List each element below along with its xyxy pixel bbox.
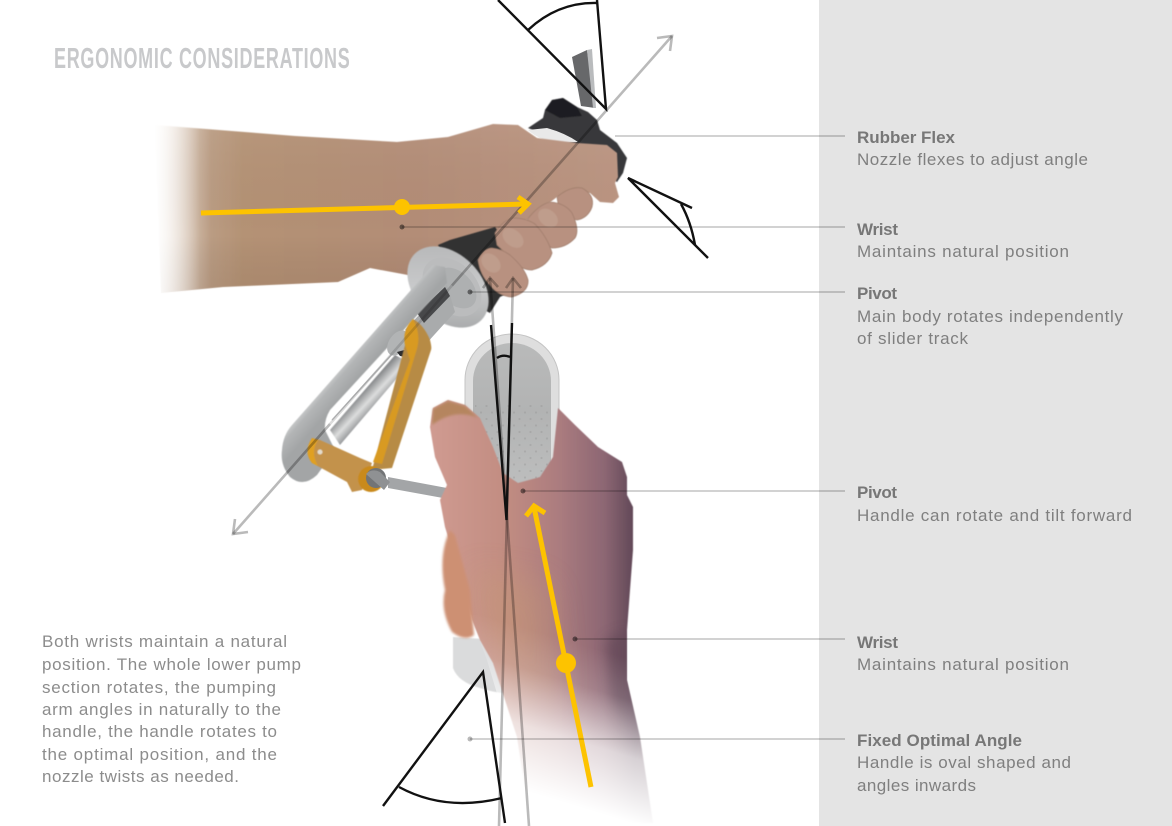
gold link	[308, 438, 384, 492]
nozzle tip	[572, 49, 596, 108]
label: handle pivot	[520, 483, 1132, 525]
label: upper wrist: Wrist	[857, 220, 898, 239]
label: fixed optimal angle: Handle is oval shaped and	[857, 753, 1071, 772]
text block: description: arm angles in naturally to the	[42, 700, 281, 719]
angle: handle tilt	[491, 323, 512, 520]
illustration: fingers of upper hand	[478, 188, 593, 297]
label: lower wrist	[572, 633, 1069, 674]
white collar	[528, 128, 578, 143]
thin rod in slot	[332, 353, 393, 420]
black handle grip	[438, 227, 520, 313]
title: ERGONOMIC CONSIDERATIONS	[54, 43, 350, 75]
text block: description: Both wrists maintain a natural	[42, 632, 287, 651]
angle: nozzle	[498, 0, 606, 109]
label: lower wrist: Maintains natural position	[857, 655, 1069, 674]
label: lower wrist: Wrist	[857, 633, 898, 652]
text block: description: the optimal position, and the	[42, 745, 277, 764]
yellow arrow: lower forearm axis	[526, 506, 591, 787]
fade to white	[470, 615, 660, 826]
clevis	[366, 468, 390, 490]
text block: description	[42, 632, 301, 786]
capsule inner	[473, 343, 551, 490]
pin	[388, 477, 447, 498]
label: pump pivot: of slider track	[857, 329, 968, 348]
grey axis arrow through pump	[233, 36, 672, 534]
warm tint on lower forearm	[470, 570, 560, 700]
label: fixed optimal angle: angles inwards	[857, 776, 976, 795]
silver frame	[282, 265, 447, 482]
label: fixed optimal angle	[468, 731, 1071, 795]
yellow arrow: upper forearm axis	[201, 197, 528, 215]
illustration: pump body and pumping arm	[282, 230, 505, 498]
label: fixed optimal angle: Fixed Optimal Angle	[857, 731, 1022, 750]
text block: description: section rotates, the pumping	[42, 678, 276, 697]
gold pumping arm	[372, 319, 431, 470]
text block: description: position. The whole lower pump	[42, 655, 301, 674]
hidden cylinder behind gold arm	[383, 326, 413, 360]
label: pump pivot	[468, 284, 1124, 348]
illustration: handle capsule	[453, 334, 559, 693]
illustration: upper forearm gripping the pump nozzle	[140, 49, 627, 313]
thumb tip	[432, 401, 478, 425]
label: rubber flex: Nozzle flexes to adjust angle	[857, 150, 1088, 169]
label: rubber flex: Rubber Flex	[857, 128, 956, 147]
angle: fist	[628, 178, 708, 258]
label: upper wrist	[400, 220, 1069, 261]
pivot disc	[391, 230, 505, 344]
wrist shadow	[604, 631, 632, 704]
lower tube	[330, 355, 410, 445]
text block: description: handle, the handle rotates to	[42, 722, 277, 741]
forearm	[140, 120, 619, 298]
text block: description: nozzle twists as needed.	[42, 767, 239, 786]
illustration: lower hand and forearm	[430, 400, 660, 826]
label: handle pivot: Handle can rotate and tilt forward	[857, 506, 1132, 525]
upper tube and slot	[405, 285, 455, 345]
rubber flex nozzle	[528, 98, 627, 182]
capsule shell	[465, 334, 559, 490]
grip dots	[475, 405, 551, 485]
label: pump pivot: Main body rotates independently	[857, 307, 1124, 326]
angle: fixed optimal angle	[383, 672, 505, 823]
label: upper wrist: Maintains natural position	[857, 242, 1069, 261]
label: pump pivot: Pivot	[857, 284, 897, 303]
capsule base	[453, 637, 503, 693]
label: rubber flex	[615, 128, 1088, 169]
panel: grey side panel	[819, 0, 1172, 826]
finger lumps	[442, 530, 474, 638]
label: handle pivot: Pivot	[857, 483, 897, 502]
grey axis arrows through handle	[483, 278, 529, 826]
